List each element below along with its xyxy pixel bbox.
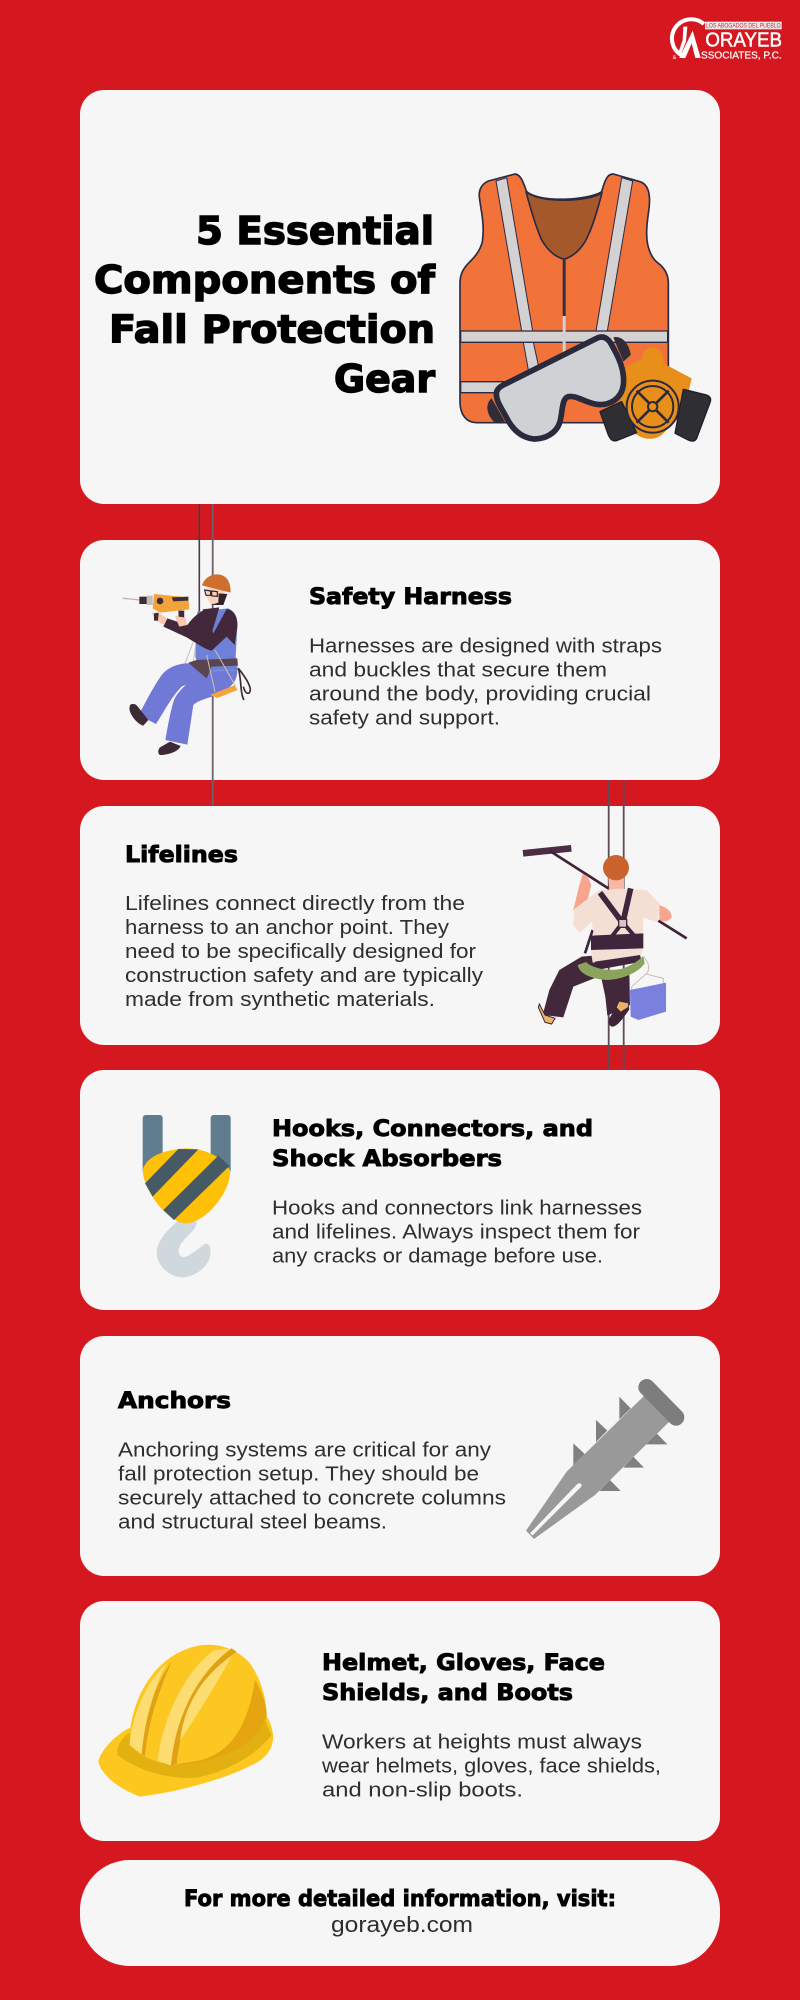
illustration: window-cleaning worker on ropes	[523, 780, 687, 1070]
body text: and non-slip boots.	[322, 1780, 523, 1802]
body text: Anchoring systems are critical for any	[118, 1440, 491, 1462]
heading	[322, 1651, 605, 1706]
logo: Gorayeb & Associates: ORAYEB	[705, 29, 782, 52]
logo: Gorayeb & Associates	[672, 19, 782, 61]
panel: hooks, connectors, shock absorbers	[80, 1070, 720, 1310]
body text: Hooks and connectors link harnesses	[272, 1198, 642, 1220]
body text: need to be specifically designed for	[125, 941, 476, 963]
body text: around the body, providing crucial	[309, 684, 651, 706]
body text: and lifelines. Always inspect them for	[272, 1222, 640, 1244]
heading: Lifelines	[125, 843, 238, 868]
panel: lifelines	[80, 806, 720, 1045]
panel: footer call to action	[80, 1860, 720, 1966]
icon: safety vest, goggles and respirator	[460, 174, 711, 441]
body text: and buckles that secure them	[309, 660, 607, 682]
heading: Anchors	[118, 1389, 231, 1414]
heading: Helmet, Gloves, Face	[322, 1651, 605, 1676]
body text	[321, 1732, 661, 1802]
logo: Gorayeb & Associates: LOS ABOGADOS DEL PUEBLO	[706, 24, 781, 30]
logo: Gorayeb & Associates: SSOCIATES, P.C.	[701, 50, 782, 61]
body text: made from synthetic materials.	[125, 989, 435, 1011]
body text: and structural steel beams.	[118, 1512, 387, 1534]
illustration: worker with drill on ropes	[123, 504, 250, 805]
body text	[309, 636, 662, 730]
heading: Safety Harness	[309, 585, 512, 610]
heading: Shock Absorbers	[272, 1147, 502, 1172]
footer heading: For more detailed information, visit:	[184, 1887, 616, 1912]
body text	[125, 893, 483, 1011]
logo: Gorayeb & Associates: &	[673, 55, 677, 61]
heading: Shields, and Boots	[322, 1681, 573, 1706]
title	[94, 209, 435, 401]
body text: harness to an anchor point. They	[125, 917, 449, 939]
body text	[118, 1440, 506, 1534]
body text: securely attached to concrete columns	[118, 1488, 506, 1510]
footer link: gorayeb.com	[331, 1912, 473, 1937]
panel: anchors	[80, 1336, 720, 1576]
body text: any cracks or damage before use.	[272, 1246, 603, 1268]
body text: Harnesses are designed with straps	[309, 636, 662, 658]
icon: crane hook	[143, 1115, 231, 1277]
title: Gear	[334, 357, 435, 401]
title: 5 Essential	[196, 209, 434, 253]
panel: helmet, gloves, face shields, boots	[80, 1601, 720, 1841]
heading: Hooks, Connectors, and	[272, 1117, 593, 1142]
panel: title card	[80, 90, 720, 504]
title: Components of	[94, 258, 435, 302]
body text: Workers at heights must always	[322, 1732, 642, 1754]
body text: wear helmets, gloves, face shields,	[321, 1756, 661, 1778]
icon: anchor bolt	[526, 1387, 676, 1539]
icon: hard hat	[98, 1645, 273, 1797]
body text: Lifelines connect directly from the	[125, 893, 465, 915]
title: Fall Protection	[109, 308, 435, 352]
heading	[272, 1117, 593, 1172]
body text: construction safety and are typically	[125, 965, 483, 987]
body text: safety and support.	[309, 708, 500, 730]
panel: safety harness	[80, 540, 720, 780]
body text: fall protection setup. They should be	[118, 1464, 479, 1486]
body text	[272, 1198, 642, 1268]
